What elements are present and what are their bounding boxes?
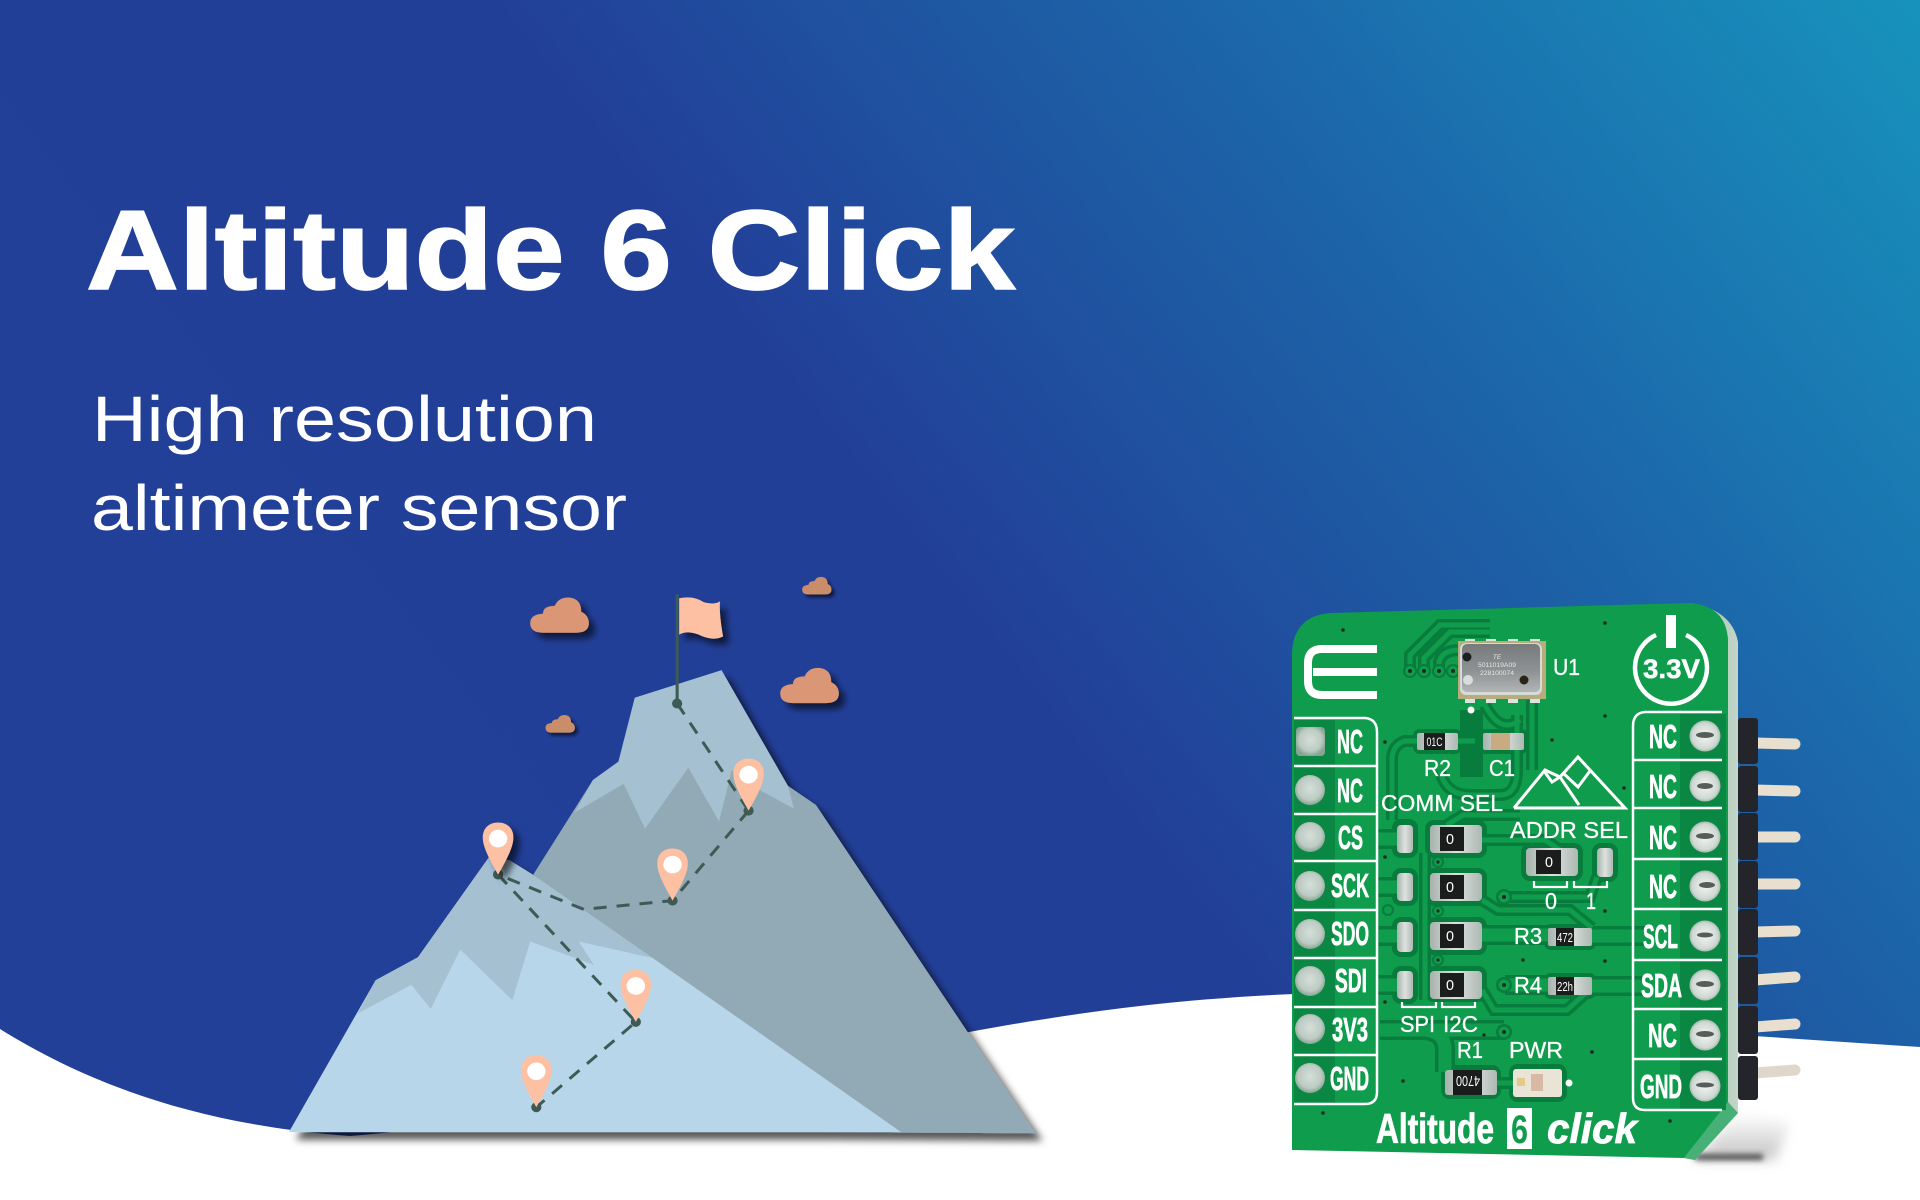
resistor R1: 4700 (1456, 1072, 1480, 1089)
resistor R2: 01C (1426, 735, 1443, 749)
via near sensor (1468, 706, 1474, 714)
single jumper pads (1397, 825, 1613, 999)
jumper brackets (1402, 881, 1607, 1007)
silkscreen labels: COMM SEL (1381, 790, 1503, 816)
silkscreen labels (1381, 654, 1628, 1063)
right pin labels: NC (1649, 868, 1677, 905)
right pin labels: GND (1640, 1068, 1682, 1105)
trace outlines (1377, 625, 1645, 1083)
board name: click (1547, 1105, 1640, 1152)
chamfer edge tint (1684, 1102, 1738, 1160)
right pin labels: SCL (1643, 918, 1678, 955)
zero-ohm jumper 1 (1430, 825, 1482, 853)
zero-ohm jumper 4 (1430, 971, 1482, 999)
zero-ohm jumper 1: 0 (1446, 831, 1454, 848)
cloud: small top (802, 577, 831, 594)
mountain logo (1514, 757, 1625, 808)
zero-ohm jumper ADDR: 0 (1545, 854, 1553, 871)
right pin labels (1640, 718, 1682, 1105)
silkscreen labels: U1 (1553, 654, 1580, 680)
mountains (289, 670, 1035, 1133)
resistor R4 (1548, 977, 1592, 995)
subtitle: High resolution (92, 383, 597, 455)
board face (1292, 603, 1728, 1158)
left solder pads (1295, 727, 1325, 1093)
E logo (1308, 649, 1377, 695)
right solder pads (1690, 720, 1720, 1102)
board name (1376, 1105, 1640, 1152)
board shadow (1695, 1113, 1790, 1160)
PWR LED (1513, 1069, 1572, 1097)
zero-ohm jumper 3 (1430, 922, 1482, 950)
subtitle: altimeter sensor (91, 472, 627, 544)
solder marks (1696, 732, 1715, 1088)
pin: base (521, 1055, 552, 1112)
zero-ohm jumper 2 (1430, 873, 1482, 901)
white ground curve (0, 993, 1920, 1200)
3.3V power badge: 3.3V (1643, 654, 1700, 684)
silkscreen labels: PWR (1509, 1037, 1563, 1063)
left pin labels: SCK (1331, 867, 1369, 904)
mountain: front peak (289, 857, 901, 1132)
capacitor C1 (1483, 733, 1524, 750)
cloud: small lower (546, 715, 575, 733)
silkscreen labels: C1 (1489, 755, 1515, 781)
vias (1321, 621, 1672, 1123)
pin: ridge (483, 823, 513, 880)
metal pins (1755, 743, 1795, 1073)
right pin labels: NC (1649, 819, 1677, 856)
dark pad zones (1294, 714, 1726, 1110)
silkscreen labels: R2 (1424, 755, 1451, 781)
zero-ohm jumper 2: 0 (1446, 879, 1454, 896)
header pins (1738, 718, 1795, 1100)
title: Altitude 6 Click (86, 187, 1015, 313)
left pin labels: SDO (1331, 915, 1369, 952)
left pin labels: CS (1338, 819, 1363, 856)
right pin labels: NC (1648, 1017, 1677, 1054)
left pin labels: NC (1337, 772, 1363, 809)
left pin labels: 3V3 (1332, 1011, 1368, 1048)
board name: Altitude (1376, 1105, 1494, 1152)
silkscreen labels: I2C (1443, 1011, 1478, 1037)
resistor R3 (1548, 928, 1592, 946)
right pin labels: NC (1649, 768, 1677, 805)
mountain illustration (289, 577, 1035, 1133)
pin: upper (733, 759, 764, 816)
resistor R4: 22h (1557, 979, 1573, 994)
cloud: large right (780, 668, 839, 703)
right pin labels: SDA (1641, 967, 1682, 1004)
black plastic housing (1738, 718, 1758, 1100)
altimeter sensor U1 (1458, 639, 1546, 703)
subtitle (91, 383, 627, 544)
board edge (1684, 603, 1738, 1160)
silkscreen labels: R3 (1514, 923, 1542, 949)
silkscreen labels: ADDR SEL (1510, 817, 1628, 843)
left pin frame (1294, 718, 1377, 1104)
altimeter sensor U1: 228100074 (1480, 670, 1514, 677)
flag (672, 594, 723, 708)
altimeter sensor U1: 5011019A09 (1478, 662, 1516, 669)
left pin labels (1330, 723, 1369, 1097)
trace copper (1377, 625, 1645, 1083)
resistor R2 (1417, 733, 1458, 750)
pin: middle (657, 849, 688, 906)
mountain: back peak (533, 670, 1035, 1133)
right pin labels: NC (1649, 718, 1677, 755)
silkscreen labels: 1 (1586, 888, 1596, 914)
left pin labels: SDI (1335, 962, 1367, 999)
silkscreen labels: SPI (1400, 1011, 1435, 1037)
silkscreen labels: R1 (1457, 1037, 1483, 1063)
zero-ohm jumper 3: 0 (1446, 928, 1454, 945)
left pin labels: NC (1337, 723, 1363, 760)
pin: lower right (621, 970, 651, 1027)
zero-ohm jumper 4: 0 (1446, 977, 1454, 994)
board name: 6 (1511, 1108, 1528, 1152)
zero-ohm jumper ADDR (1526, 848, 1578, 876)
resistor R1 (1445, 1070, 1497, 1095)
component clearance halos (1392, 729, 1618, 1102)
resistor R3: 472 (1557, 930, 1573, 945)
dashed route (498, 704, 749, 1107)
cloud: large left (530, 598, 589, 633)
right pin frame (1633, 712, 1722, 1110)
silkscreen labels: R4 (1514, 972, 1542, 998)
3.3V power badge (1635, 615, 1707, 704)
PCB board (1292, 603, 1738, 1160)
dark copper fill below sensor (1460, 710, 1483, 777)
altimeter sensor U1: TE (1493, 654, 1502, 661)
silkscreen labels: 0 (1545, 888, 1557, 914)
left pin labels: GND (1330, 1060, 1369, 1097)
